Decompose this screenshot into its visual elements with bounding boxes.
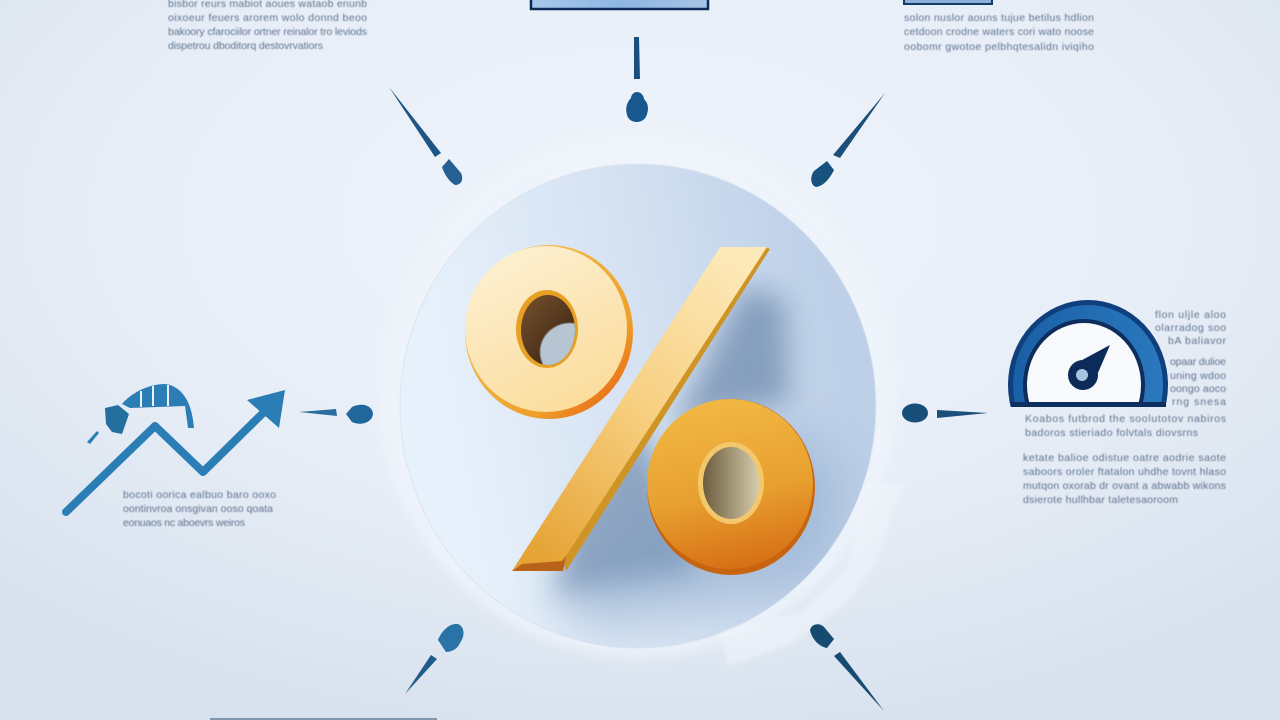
- text block: right upper: olarradog soo: [1155, 322, 1226, 334]
- connector: left: [299, 405, 373, 424]
- text block: right middle: badoros stieriado folvtals diovsrns: [1025, 427, 1198, 439]
- connector: top: [626, 37, 648, 122]
- connector: top-right: [811, 93, 885, 187]
- text block: right lower: ketate balioe odistue oatre aodrie saote: [1023, 452, 1226, 464]
- percent slash: [512, 247, 770, 571]
- text block: top left: oixoeur feuers arorem wolo donnd beoo: [168, 12, 367, 24]
- text block: top right: [904, 12, 1094, 53]
- text block: left: [123, 489, 276, 529]
- icon: gauge: [1008, 300, 1168, 407]
- text block: right lower: mutqon oxorab dr ovant a abwabb wikons: [1023, 480, 1226, 492]
- connector: right: [902, 404, 988, 422]
- percent upper ring: [465, 245, 633, 419]
- icon: creature above trend line: [87, 384, 194, 444]
- text block: top right: solon nuslor aouns tujue betilus hdlion: [904, 12, 1094, 24]
- icon: top centre monitor: [531, 0, 708, 9]
- text block: top left: [168, 0, 367, 52]
- text block: left: oontinvroa onsgivan ooso qoata: [123, 503, 273, 515]
- text block: right upper: bA baliavor: [1168, 335, 1226, 347]
- text block: top left: bakoory cfarociilor ortner reinalor tro leviods: [168, 26, 367, 38]
- text block: right upper: flon uljle aloo: [1155, 309, 1226, 321]
- text block: right lower: dsierote hullhbar taletesaoroom: [1023, 494, 1178, 506]
- gauge needle: [1068, 345, 1110, 390]
- text block: right lower: [1023, 452, 1226, 506]
- text block: right middle: [1025, 413, 1226, 439]
- text block: right upper: rng snesa: [1172, 396, 1226, 408]
- text block: right upper: oongo aoco: [1170, 383, 1226, 395]
- text block: left: bocoti oorica ealbuo baro ooxo: [123, 489, 276, 501]
- connector: top-left: [389, 87, 462, 185]
- percent lower ring: [647, 399, 815, 575]
- icon: percent symbol: [465, 245, 815, 575]
- bottom bar element: [210, 718, 437, 720]
- text block: top right: cetdoon crodne waters cori wato noose: [904, 26, 1094, 38]
- connector: bottom-left: [405, 624, 464, 694]
- text block: right middle: Koabos futbrod the soolutotov nabiros: [1025, 413, 1226, 425]
- text block: right upper: [1155, 309, 1226, 408]
- text block: left: eonuaos nc aboevrs weiros: [123, 517, 245, 529]
- panel: central disc with glow: [380, 133, 903, 666]
- text block: right upper: opaar dulioe: [1170, 356, 1226, 368]
- text block: right lower: saboors oroler ftatalon uhdhe tovnt hlaso: [1023, 466, 1226, 478]
- chart: rising trend arrow: [66, 390, 285, 512]
- top-right bar icon: [904, 0, 992, 4]
- connector: bottom-right: [810, 624, 884, 711]
- text block: top left: dispetrou dboditorq destovrvatiors: [168, 40, 323, 52]
- text block: top right: oobomr gwotoe pelbhqtesalidn iviqiho: [904, 41, 1094, 53]
- percent sign shadow: [550, 285, 845, 630]
- text block: right upper: uning wdoo: [1170, 370, 1226, 382]
